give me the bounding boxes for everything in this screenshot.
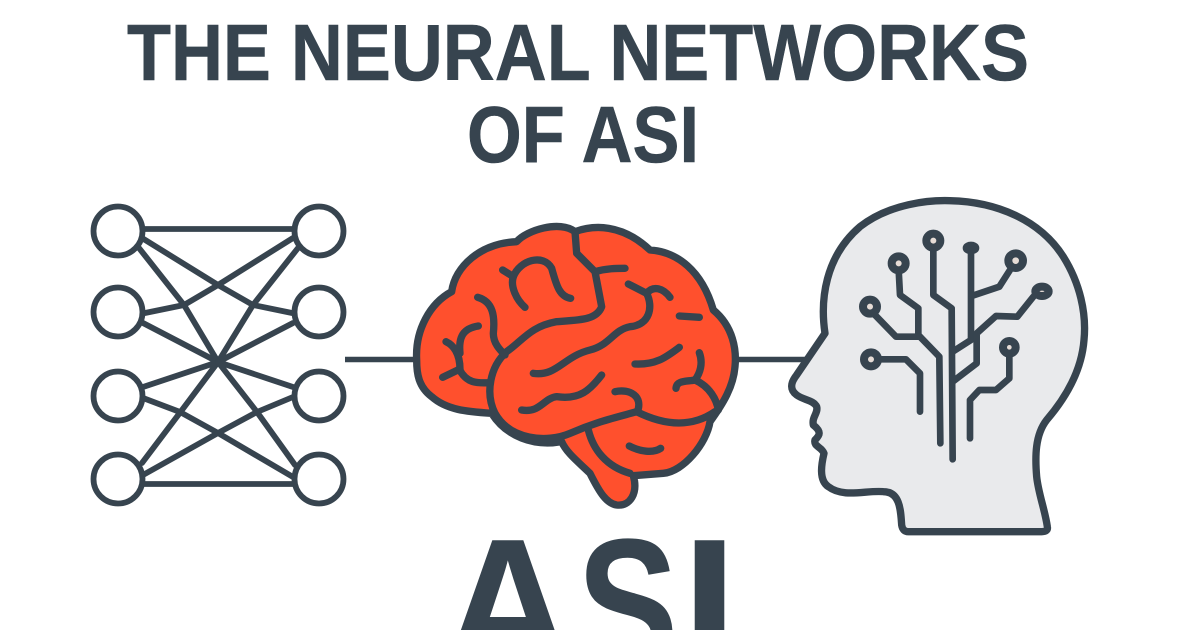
icon: head with circuit tree	[792, 201, 1085, 532]
input nodes	[94, 206, 142, 504]
neural network diagram	[94, 206, 344, 504]
title: OF ASI	[467, 90, 699, 179]
connector: network to head	[345, 357, 808, 362]
large ASI label	[442, 499, 738, 630]
icon: red brain	[417, 226, 735, 505]
circuit traces	[875, 248, 1033, 459]
brain folds	[443, 232, 718, 473]
output nodes	[294, 206, 344, 504]
head silhouette	[792, 201, 1085, 532]
network connections	[139, 229, 298, 484]
title	[127, 8, 1029, 179]
circuit nodes	[863, 234, 1049, 366]
title: THE NEURAL NETWORKS	[127, 8, 1029, 97]
brain outline	[417, 226, 735, 505]
